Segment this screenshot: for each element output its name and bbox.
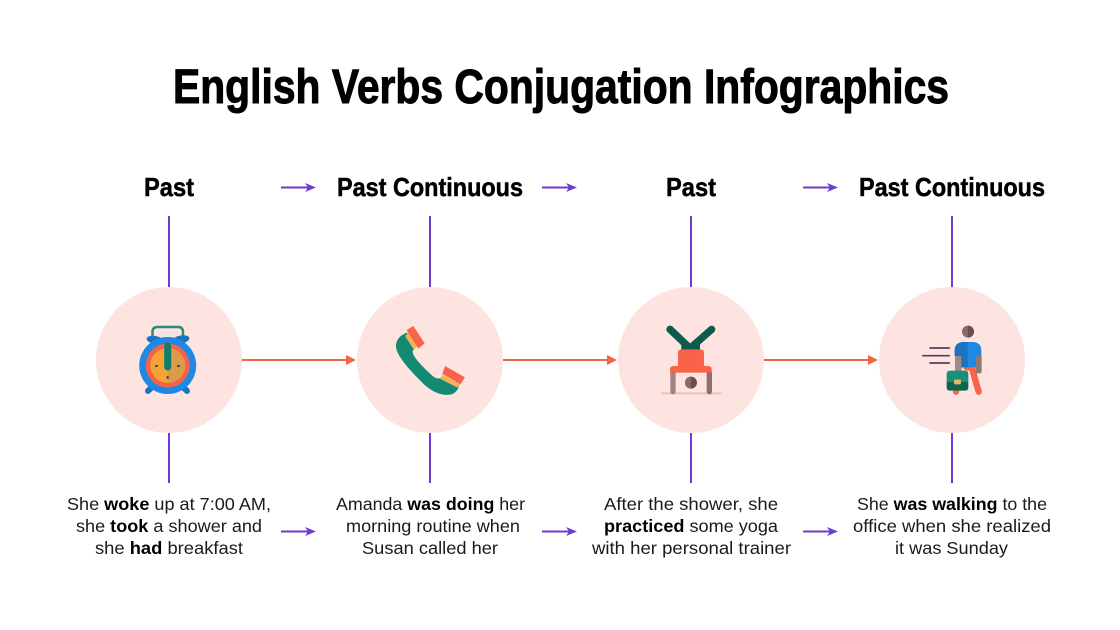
- text block: step 1 description: [67, 494, 271, 558]
- heading: step 2 Past Continuous: Past Continuous: [337, 172, 523, 202]
- text block: step 1 description: She woke up at 7:00 AM,: [67, 494, 271, 514]
- text block: step 2 description: Amanda was doing her: [336, 494, 525, 514]
- text block: step 3 description: After the shower, she: [604, 494, 778, 514]
- heading: step 1 Past: Past: [144, 172, 194, 202]
- icon: person walking with briefcase: [923, 326, 982, 392]
- arrow: bottom 3 to 4: [803, 527, 838, 536]
- icon: telephone handset: [397, 326, 465, 394]
- text block: step 2 description: morning routine when: [346, 516, 520, 536]
- arrow: middle 2 to 3: [503, 355, 617, 365]
- arrow: top 3 to 4: [803, 183, 838, 192]
- arrow: bottom 1 to 2: [281, 527, 316, 536]
- text block: step 4 description: [853, 494, 1051, 558]
- panel: step 1 alarm clock circle: [96, 287, 242, 433]
- text block: step 1 description: she took a shower and: [76, 516, 262, 536]
- title: English Verbs Conjugation Infographics: [173, 61, 949, 114]
- icon: person doing headstand: [661, 329, 722, 394]
- arrow: middle 1 to 2: [242, 355, 356, 365]
- arrow: middle 3 to 4: [764, 355, 878, 365]
- text block: step 1 description: she had breakfast: [95, 538, 243, 558]
- arrow: top 2 to 3: [542, 183, 577, 192]
- panel: step 3 yoga circle: [618, 287, 764, 433]
- arrow: top 1 to 2: [281, 183, 316, 192]
- text block: step 3 description: [591, 494, 791, 558]
- text block: step 4 description: She was walking to the: [857, 494, 1047, 514]
- text block: step 3 description: practiced some yoga: [604, 516, 778, 536]
- heading: step 4 Past Continuous: Past Continuous: [859, 172, 1045, 202]
- arrow: bottom 2 to 3: [542, 527, 577, 536]
- icon: alarm clock: [139, 327, 196, 394]
- heading: step 3 Past: Past: [666, 172, 716, 202]
- text block: step 4 description: it was Sunday: [895, 538, 1008, 558]
- text block: step 3 description: with her personal trainer: [591, 538, 791, 558]
- panel: step 2 telephone circle: [357, 287, 503, 433]
- panel: step 4 walking circle: [879, 287, 1025, 433]
- text block: step 2 description: [336, 494, 525, 558]
- text block: step 4 description: office when she realized: [853, 516, 1051, 536]
- text block: step 2 description: Susan called her: [362, 538, 498, 558]
